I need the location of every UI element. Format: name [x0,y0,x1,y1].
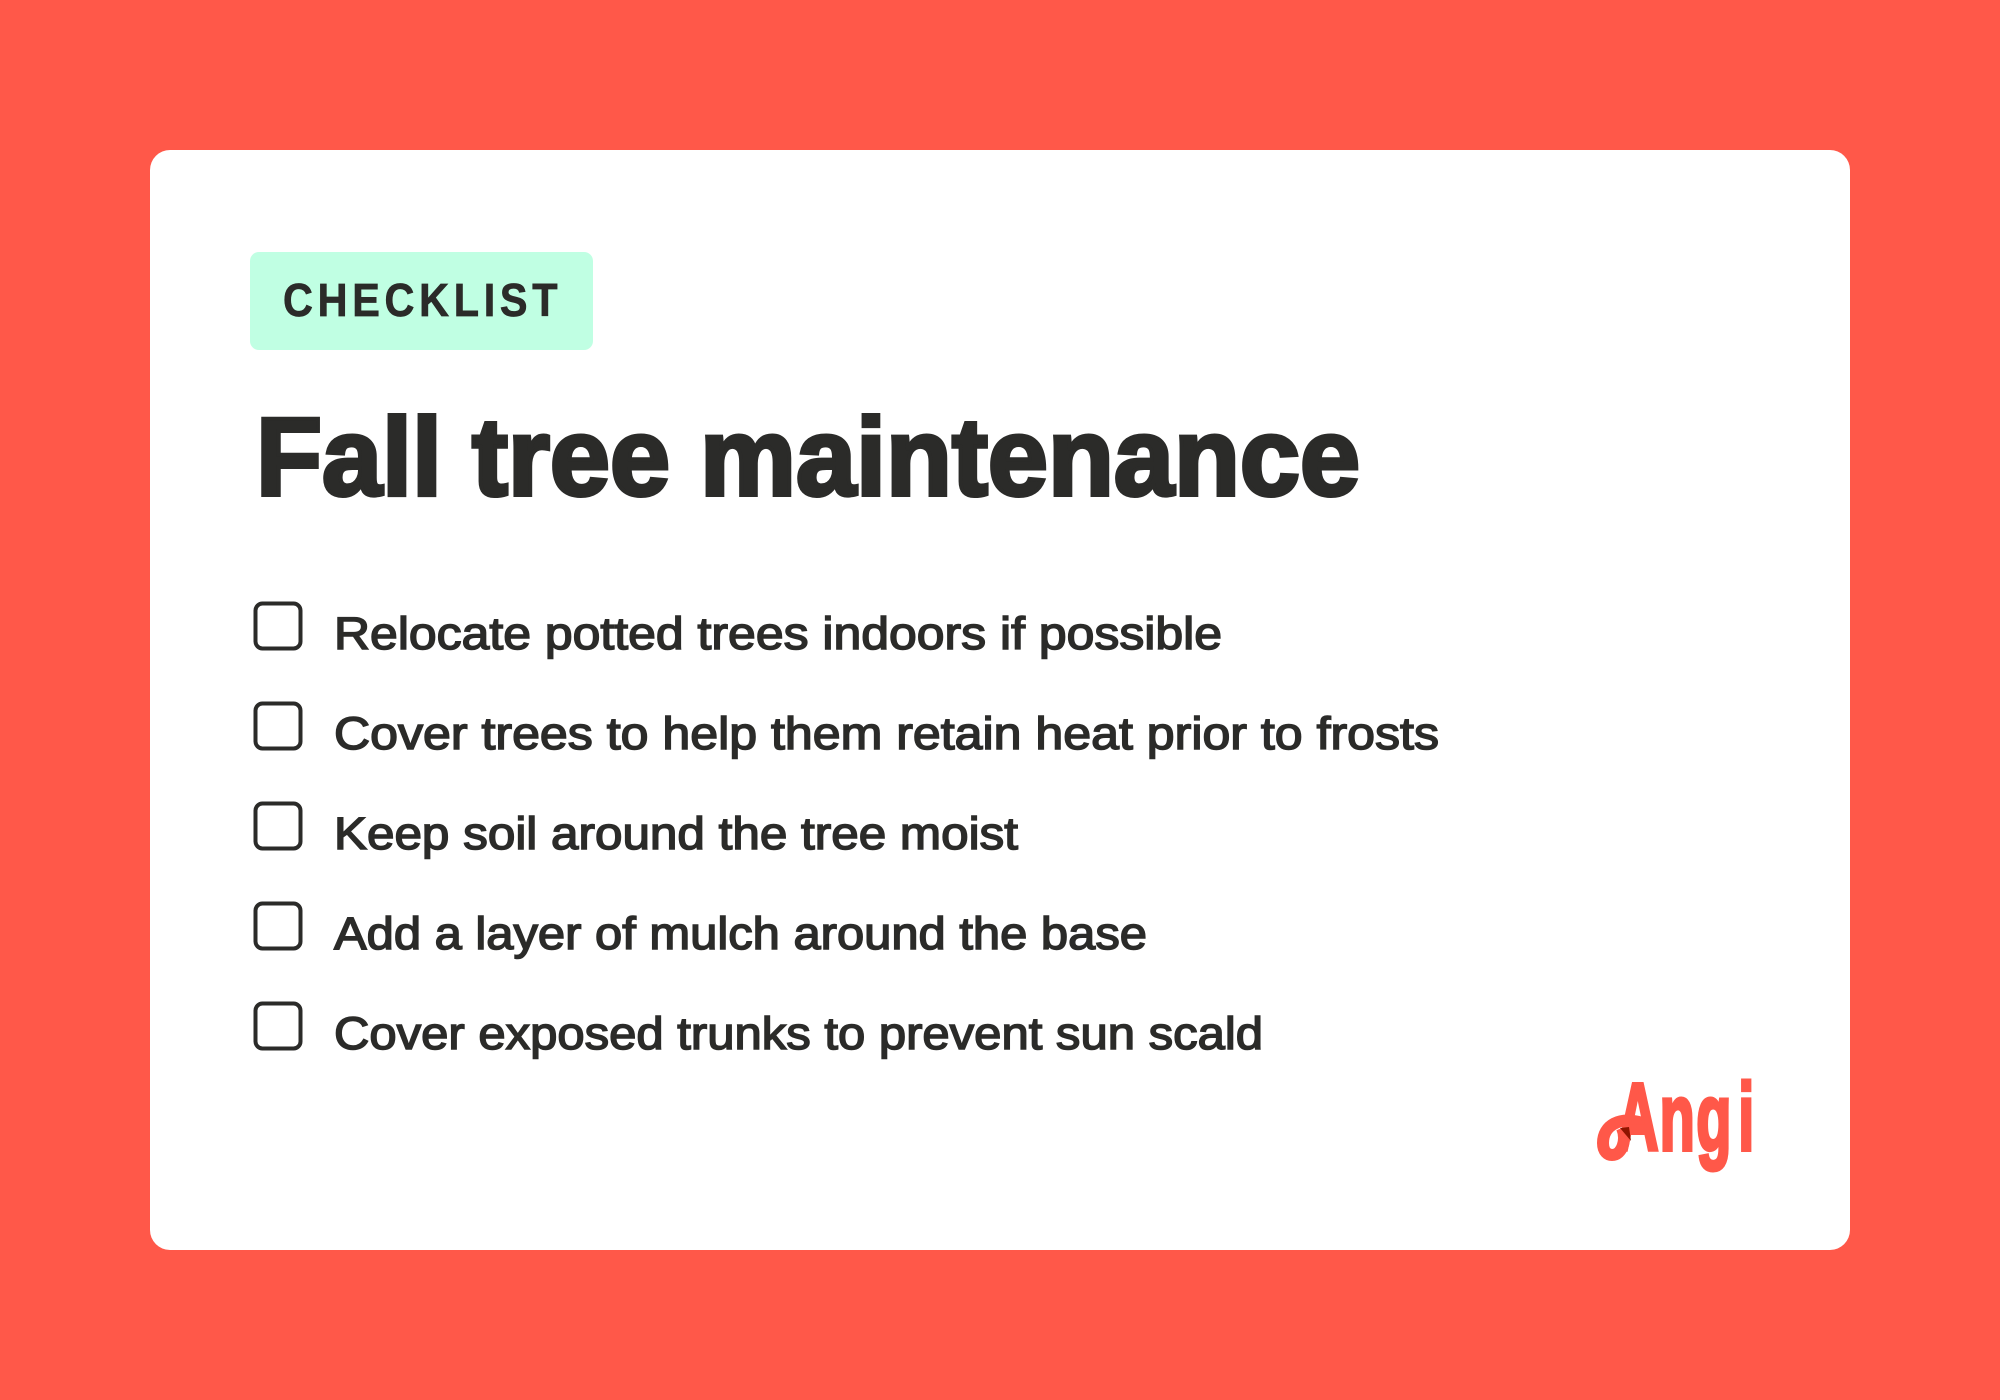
logo: Angi: Angi [1617,1063,1754,1171]
item 4: Add a layer of mulch around the base [334,908,1147,959]
item 5: Cover exposed trunks to prevent sun scald [334,1008,1263,1059]
badge: checklist [250,252,593,350]
item 1: Relocate potted trees indoors if possible [334,608,1222,659]
checklist [256,604,1439,1059]
title: Fall tree maintenance [256,396,1360,519]
item 3: Keep soil around the tree moist [334,808,1019,859]
badge: checklist: CHECKLIST [283,275,558,327]
item 2: Cover trees to help them retain heat prior to frosts [334,708,1439,759]
panel: white card [150,150,1850,1250]
